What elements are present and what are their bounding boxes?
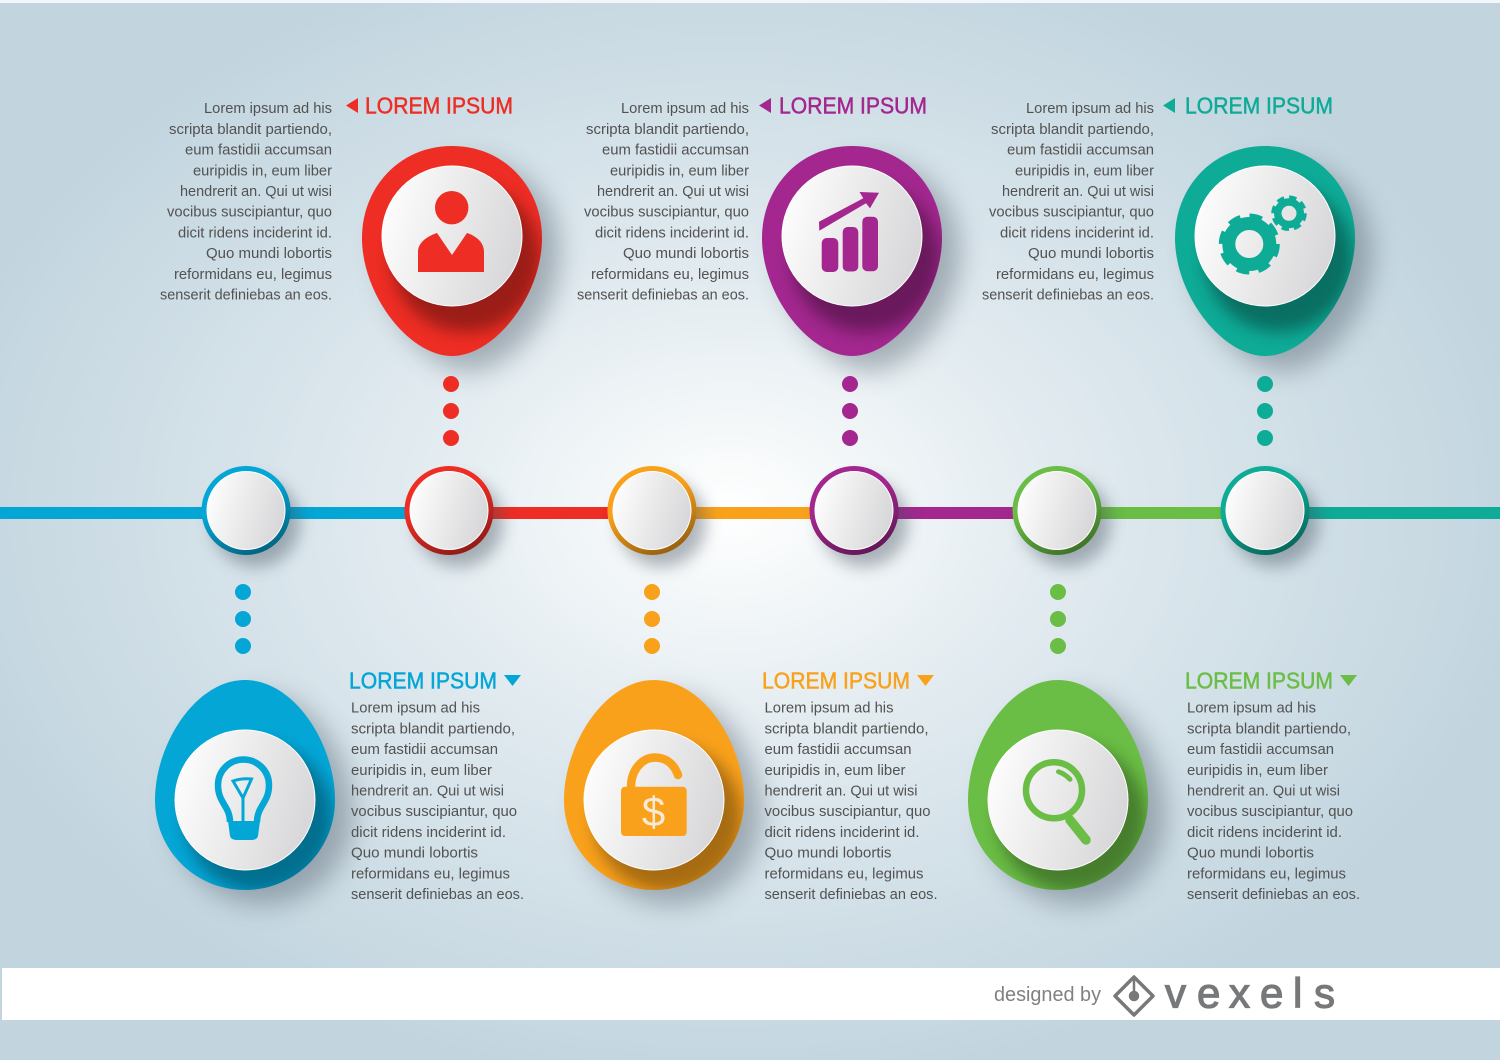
green text block [1187, 700, 1360, 903]
purple text block: senserit definiebas an eos. [577, 286, 749, 304]
blue connector dots [235, 584, 251, 654]
teal text block: Lorem ipsum ad his [1026, 100, 1154, 117]
green text block: Lorem ipsum ad his [1187, 700, 1316, 716]
red text block: Lorem ipsum ad his [204, 100, 332, 117]
blue heading: LOREM IPSUM [349, 668, 497, 694]
orange text block: Lorem ipsum ad his [764, 700, 894, 716]
red text block: euripidis in, eum liber [193, 162, 332, 180]
panel: purple step [577, 92, 960, 446]
green text block: reformidans eu, legimus [1187, 866, 1346, 882]
green connector dots [1050, 584, 1066, 654]
icon: open lock with dollar [621, 758, 687, 836]
red heading arrow [346, 98, 358, 113]
green heading: LOREM IPSUM [1185, 668, 1333, 694]
blue text block: dicit ridens inciderint id. [351, 824, 506, 841]
green heading arrow [1340, 675, 1357, 686]
panel: teal step [982, 92, 1373, 446]
green text block: eum fastidii accumsan [1187, 741, 1334, 758]
timeline node: green [1012, 466, 1111, 567]
purple connector dots [842, 376, 858, 446]
teal heading: LOREM IPSUM [1185, 92, 1333, 118]
footer band [2, 968, 1500, 1020]
orange text block: scripta blandit partiendo, [764, 720, 928, 738]
red heading: LOREM IPSUM [365, 92, 513, 118]
orange text block: Quo mundi lobortis [764, 844, 892, 862]
blue text block: senserit definiebas an eos. [351, 886, 524, 903]
top edge highlight [0, 0, 1500, 3]
green pin [968, 680, 1166, 905]
red text block: Quo mundi lobortis [206, 245, 332, 262]
orange heading arrow [917, 675, 934, 686]
green text block: scripta blandit partiendo, [1187, 720, 1351, 738]
blue text block: Quo mundi lobortis [351, 844, 478, 862]
panel: green step [968, 584, 1360, 905]
teal text block: Quo mundi lobortis [1028, 245, 1154, 262]
purple pin [762, 146, 960, 371]
purple text block: Quo mundi lobortis [623, 245, 749, 262]
icon: open lock with dollar: $ [642, 788, 665, 835]
timeline node: orange [608, 466, 706, 567]
teal text block: dicit ridens inciderint id. [1000, 224, 1154, 242]
icon: person [418, 191, 484, 272]
teal text block: hendrerit an. Qui ut wisi [1002, 183, 1154, 200]
icon: growth chart [819, 192, 879, 272]
teal heading arrow [1163, 98, 1175, 113]
purple heading arrow [759, 98, 771, 113]
teal text block: vocibus suscipiantur, quo [989, 204, 1154, 220]
purple text block: Lorem ipsum ad his [621, 100, 749, 117]
blue pin [155, 680, 353, 905]
teal pin [1175, 146, 1373, 371]
timeline node: purple [810, 466, 908, 567]
red text block [160, 100, 332, 304]
orange connector dots [644, 584, 660, 654]
orange text block: dicit ridens inciderint id. [764, 824, 920, 841]
orange text block: reformidans eu, legimus [764, 866, 924, 882]
timeline node: red [404, 466, 503, 567]
teal connector dots [1257, 376, 1273, 446]
blue text block: eum fastidii accumsan [351, 741, 498, 758]
red text block: vocibus suscipiantur, quo [167, 204, 332, 220]
panel: blue step [155, 584, 524, 905]
green text block: senserit definiebas an eos. [1187, 886, 1360, 903]
purple text block: euripidis in, eum liber [610, 162, 749, 180]
purple text block: hendrerit an. Qui ut wisi [597, 183, 749, 200]
blue text block [351, 700, 524, 903]
teal text block: senserit definiebas an eos. [982, 286, 1154, 304]
red pin [362, 146, 560, 371]
green text block: euripidis in, eum liber [1187, 762, 1328, 779]
green text block: vocibus suscipiantur, quo [1187, 803, 1353, 820]
purple text block: vocibus suscipiantur, quo [584, 204, 749, 220]
icon: gears [1221, 197, 1305, 272]
green text block: hendrerit an. Qui ut wisi [1187, 782, 1340, 800]
orange text block [764, 700, 938, 903]
icon: vexels logo [1115, 977, 1153, 1015]
panel: orange step [564, 584, 938, 905]
teal text block [982, 100, 1154, 304]
blue text block: reformidans eu, legimus [351, 866, 510, 882]
purple text block: reformidans eu, legimus [591, 266, 749, 283]
orange text block: euripidis in, eum liber [764, 762, 906, 779]
green text block: dicit ridens inciderint id. [1187, 824, 1342, 841]
icon: magnifying glass [1026, 762, 1086, 840]
orange text block: hendrerit an. Qui ut wisi [764, 782, 918, 800]
purple text block: eum fastidii accumsan [602, 142, 749, 158]
icon: light bulb [218, 760, 269, 840]
purple text block: dicit ridens inciderint id. [595, 224, 749, 242]
red text block: senserit definiebas an eos. [160, 286, 332, 304]
teal text block: reformidans eu, legimus [996, 266, 1154, 283]
orange text block: eum fastidii accumsan [764, 741, 912, 758]
orange text block: vocibus suscipiantur, quo [764, 803, 930, 820]
panel: red step [160, 92, 560, 446]
blue heading arrow [504, 675, 521, 686]
orange heading: LOREM IPSUM [762, 668, 910, 694]
timeline node: blue [202, 466, 300, 567]
blue text block: vocibus suscipiantur, quo [351, 803, 517, 820]
blue text block: euripidis in, eum liber [351, 762, 492, 779]
teal text block: euripidis in, eum liber [1015, 162, 1154, 180]
red text block: scripta blandit partiendo, [169, 121, 332, 138]
vexels wordmark: vexels [1165, 970, 1335, 1016]
red text block: eum fastidii accumsan [185, 142, 332, 158]
designed by label: designed by [994, 984, 1101, 1006]
teal text block: eum fastidii accumsan [1007, 142, 1154, 158]
orange pin [564, 680, 762, 905]
green text block: Quo mundi lobortis [1187, 844, 1314, 862]
teal text block: scripta blandit partiendo, [991, 121, 1154, 138]
blue text block: hendrerit an. Qui ut wisi [351, 782, 504, 800]
timeline node: teal [1220, 466, 1319, 567]
red text block: hendrerit an. Qui ut wisi [180, 183, 332, 200]
purple heading: LOREM IPSUM [779, 92, 927, 118]
timeline line [0, 507, 1500, 519]
blue text block: Lorem ipsum ad his [351, 700, 480, 716]
purple text block: scripta blandit partiendo, [586, 121, 749, 138]
red text block: dicit ridens inciderint id. [178, 224, 332, 242]
red text block: reformidans eu, legimus [174, 266, 332, 283]
purple text block [577, 100, 749, 304]
blue text block: scripta blandit partiendo, [351, 720, 515, 738]
orange text block: senserit definiebas an eos. [764, 886, 938, 903]
red connector dots [443, 376, 459, 446]
